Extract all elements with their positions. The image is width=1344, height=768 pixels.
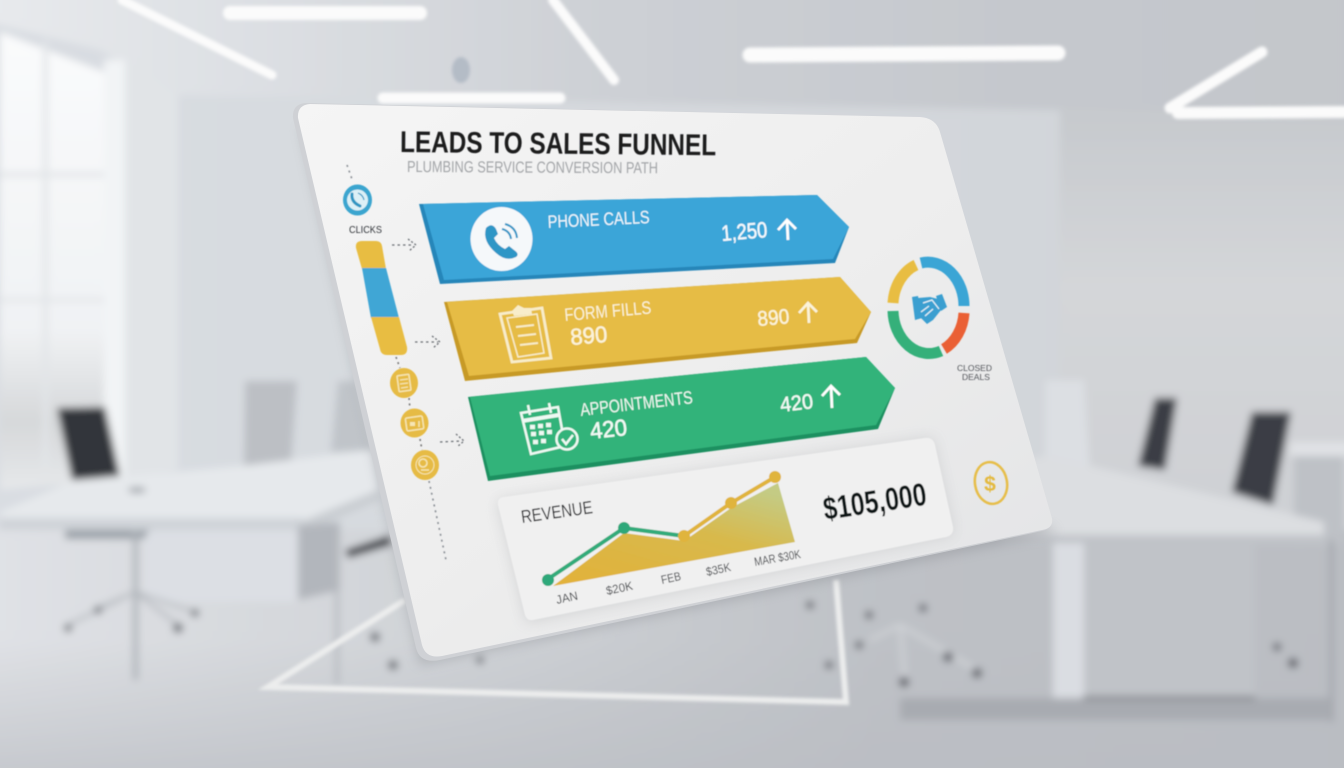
form fills value: 890 [756,305,790,331]
arrow: to appointments [440,434,464,447]
left path: form icon [390,357,418,398]
appointments label: APPOINTMENTS [579,387,694,420]
stage: phone calls banner [419,195,849,284]
ceiling lights [122,0,1344,113]
axis labels [555,547,802,607]
appointments value: 420 [779,390,814,417]
floor frame stand [268,580,846,702]
line yellow [684,477,775,536]
data points [542,471,781,586]
appointments count: 420 [589,414,628,444]
icon: clipboard [500,305,551,362]
icon: handshake [912,294,947,324]
ring: blue segment [921,262,964,306]
left path: person icon [411,439,446,560]
icon: dollar coin: $ [984,473,996,496]
left path: clicks icon [343,165,372,216]
form fills label: FORM FILLS [564,297,652,325]
closed deals ring chart [893,262,964,354]
phone calls value: 1,250 [720,217,768,246]
up arrow [822,386,840,408]
ring: green segment [893,311,941,354]
left desk and chairs [0,381,484,685]
closed deals label: DEALS [962,372,990,382]
ring: red segment [944,313,964,349]
phone calls label: PHONE CALLS [547,207,650,232]
area chart [542,471,795,586]
closed deals label: CLOSED [957,363,992,373]
arrow: to phone calls [392,239,416,251]
form fills count: 890 [569,321,608,350]
stage: form fills banner [444,277,871,381]
arrow: to form fills [415,336,440,348]
axis labels: $20K [605,579,634,598]
left path: stacked funnel bar [356,241,407,355]
subtitle: PLUMBING SERVICE CONVERSION PATH [407,159,658,177]
line green [548,528,684,579]
up arrow [799,303,817,323]
panel: revenue [498,438,953,622]
right desk and chairs [806,380,1344,722]
icon: calendar [521,403,578,454]
axis labels: FEB [660,569,682,587]
revenue total: $105,000 [821,476,929,527]
stage: appointments banner [468,357,895,481]
clicks label: CLICKS [349,224,382,236]
chart area [553,483,795,586]
ring: yellow segment [893,265,916,303]
axis labels: $35K [705,560,732,579]
revenue heading: REVENUE [520,497,594,527]
up arrow [778,220,796,240]
icon: phone [470,207,532,271]
icon: dollar coin [972,460,1010,506]
axis labels: JAN [555,589,579,607]
window [0,32,104,490]
axis labels: MAR $30K [753,547,802,569]
panel: funnel card [293,103,1058,665]
title: LEADS TO SALES FUNNEL [400,126,716,162]
left path: calendar icon [400,398,428,438]
